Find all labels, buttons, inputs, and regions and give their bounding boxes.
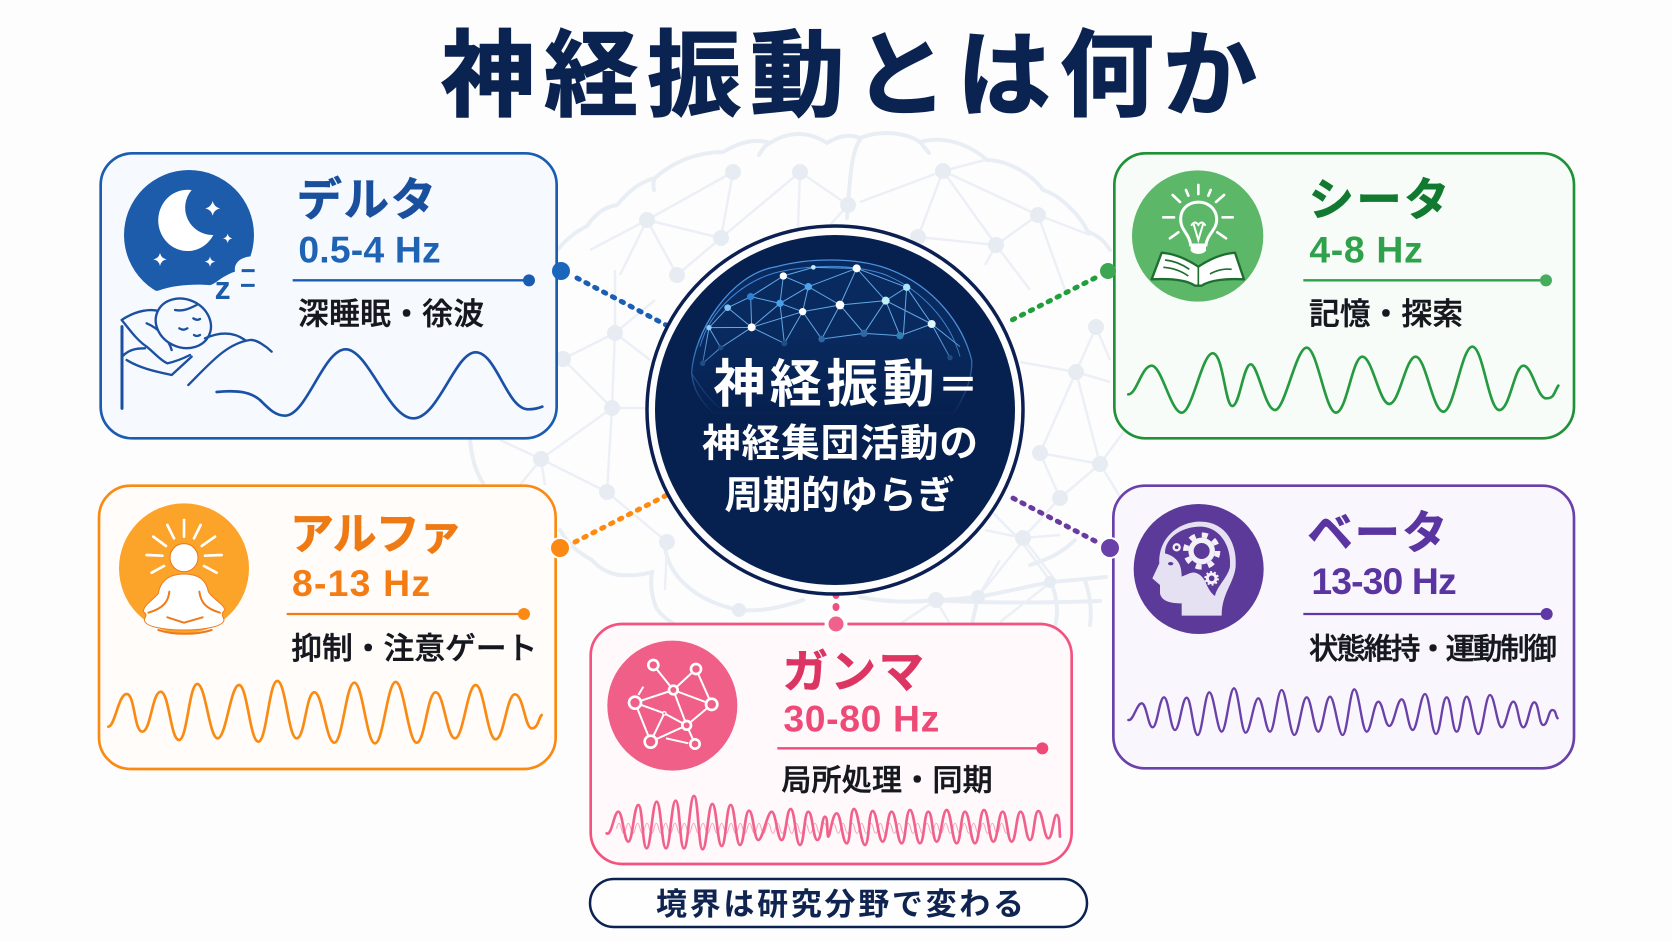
gamma frequency: 30-80 Hz [783, 698, 939, 740]
central disc [655, 235, 1015, 585]
footnote text: 境界は研究分野で変わる [656, 879, 1024, 924]
icon: meditating person [119, 503, 249, 634]
delta waveform [217, 349, 542, 418]
alpha heading: アルファ [290, 498, 463, 562]
central text line 2: 神経集団活動の [702, 413, 978, 469]
connector end dot: beta [1100, 538, 1120, 558]
connector: beta [1007, 495, 1095, 541]
panel: theta [1114, 153, 1574, 438]
network links [500, 160, 1125, 624]
connector end dot: alpha [550, 538, 570, 558]
icon: head with gears [1134, 504, 1264, 634]
alpha divider [287, 608, 530, 620]
delta divider [293, 274, 535, 286]
central circle [647, 226, 1023, 594]
beta heading: ベータ [1307, 496, 1447, 562]
delta frequency: 0.5-4 Hz [298, 229, 441, 271]
footnote pill [590, 879, 1087, 927]
gamma divider [777, 742, 1048, 754]
connector: alpha [575, 495, 667, 542]
network nodes [533, 163, 1108, 617]
central text line 3: 周期的ゆらぎ [724, 464, 955, 520]
panel: beta [1113, 486, 1574, 768]
brain outline [470, 133, 1110, 626]
icon: light bulb and book [1132, 170, 1263, 302]
theta card box [1114, 153, 1574, 438]
delta description: 深睡眠・徐波 [298, 289, 484, 334]
delta heading: デルタ [297, 164, 436, 230]
gamma card box [591, 624, 1072, 864]
faint brain network background [470, 133, 1125, 626]
alpha frequency: 8-13 Hz [292, 562, 430, 604]
beta waveform [1128, 688, 1558, 735]
connector: gamma [832, 591, 840, 611]
connector end dot: gamma [826, 614, 846, 634]
icon: moon and sleeping person [122, 170, 272, 408]
connector: delta [577, 278, 666, 325]
panel: gamma [591, 624, 1072, 864]
brain network in disc [683, 260, 980, 520]
panel: delta [101, 153, 557, 438]
central text line 1: 神経振動 [713, 342, 935, 417]
alpha card box [99, 486, 556, 769]
gamma heading: ガンマ [783, 635, 924, 701]
connector end dot: theta [1100, 263, 1116, 279]
theta heading: シータ [1309, 164, 1449, 230]
title: 神経振動とは何か [441, 0, 1257, 136]
beta description: 状態維持・運動制御 [1309, 626, 1557, 668]
beta frequency: 13-30 Hz [1311, 560, 1457, 602]
central equals sign: ＝ [937, 352, 979, 412]
delta card box [101, 153, 557, 438]
theta description: 記憶・探索 [1309, 289, 1463, 334]
central ring [647, 226, 1023, 594]
theta waveform [1128, 347, 1558, 413]
gamma waveform [607, 796, 1060, 849]
icon: moon and sleeping person: z [215, 270, 231, 306]
icon: neural nodes [607, 641, 737, 771]
theta frequency: 4-8 Hz [1309, 229, 1423, 271]
theta divider [1303, 274, 1552, 286]
beta card box [1113, 486, 1574, 768]
connector: theta [1006, 278, 1095, 323]
alpha waveform [108, 681, 542, 743]
beta divider [1303, 608, 1553, 620]
gamma description: 局所処理・同期 [781, 756, 993, 800]
connector end dot: delta [552, 262, 570, 280]
alpha description: 抑制・注意ゲート [291, 623, 537, 668]
panel: alpha [99, 486, 556, 769]
